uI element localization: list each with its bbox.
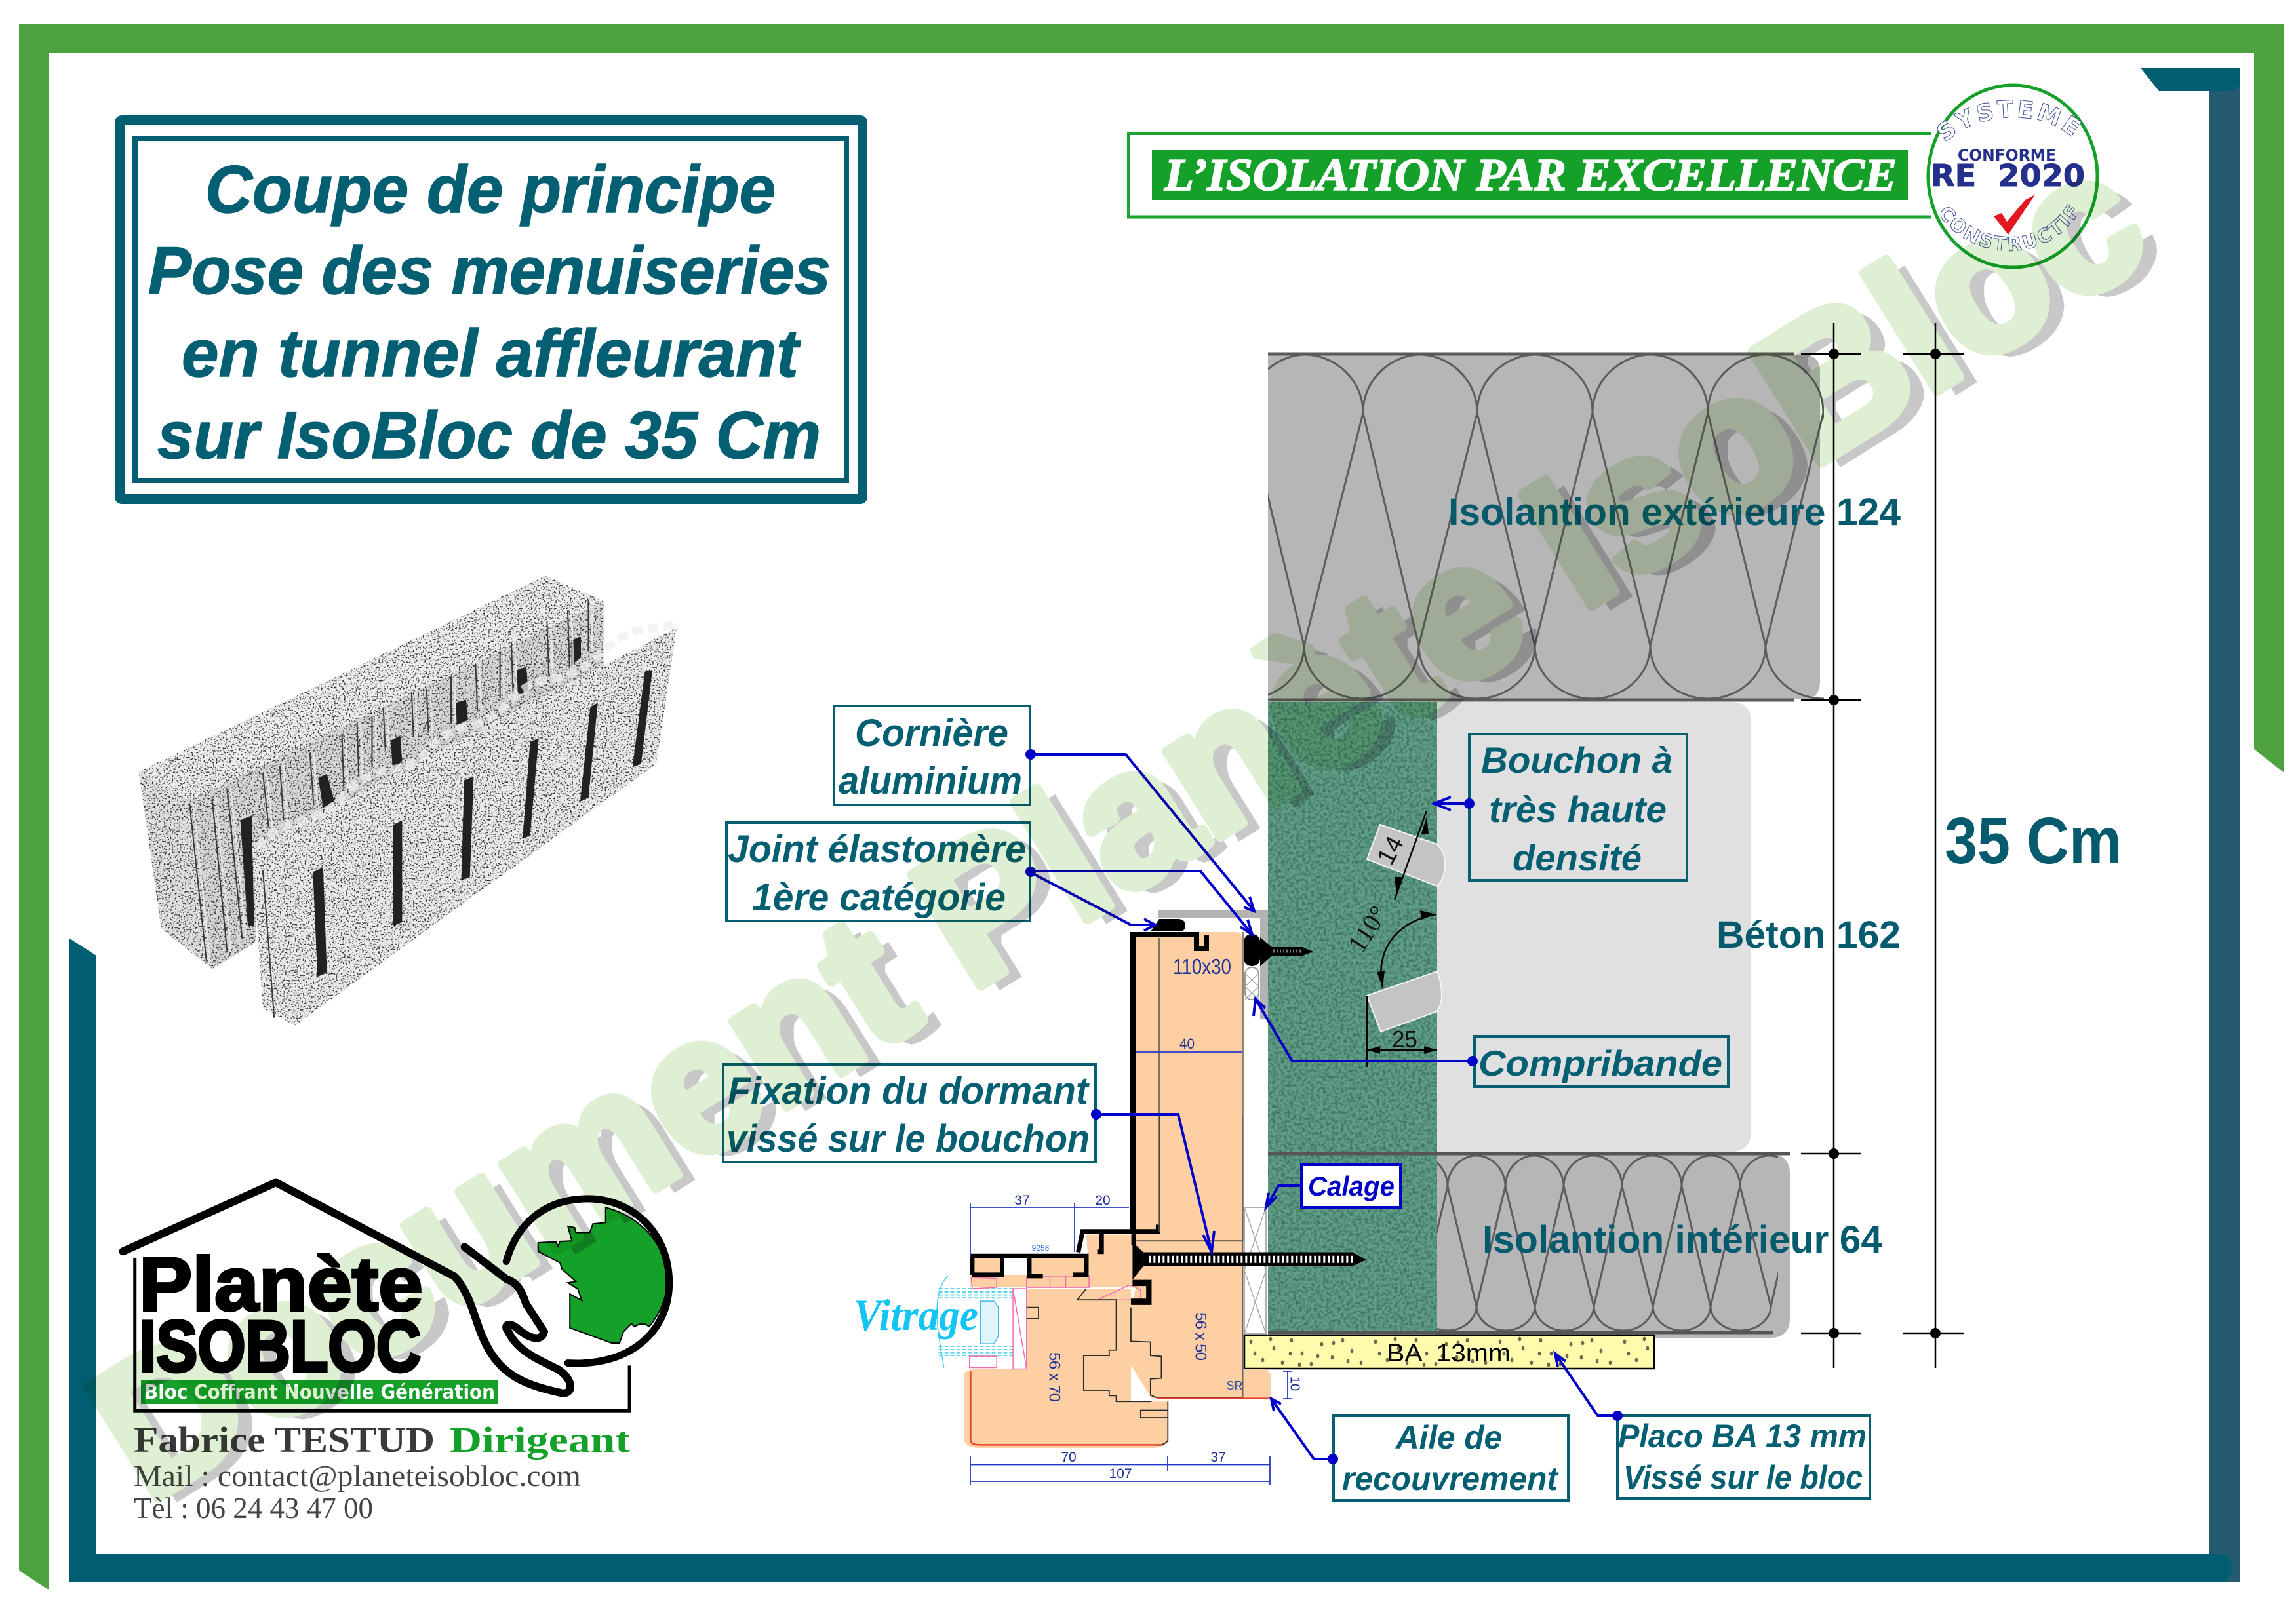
size 40: 40 [1179, 1036, 1195, 1052]
callout: fixation du dormant: vissé sur le bouchon [726, 1118, 1090, 1160]
label: exterior insulation: Isolantion extérieure 124 [1448, 491, 1901, 534]
title text: Coupe de principe [205, 152, 776, 227]
callout: bouchon [1434, 734, 1687, 880]
window frame cross section [854, 932, 1366, 1485]
callout: fixation du dormant: Fixation du dormant [728, 1070, 1090, 1112]
badge: red check [1994, 195, 2035, 235]
dimension 25: 25 [1392, 1026, 1417, 1053]
label: 35 Cm: 35 Cm [1945, 804, 2122, 878]
exterior insulation [1268, 353, 1901, 701]
angle bracket and joints [1151, 910, 1313, 1019]
title box: sur IsoBloc de 35 Cm [157, 398, 821, 473]
logo: house walls [135, 1258, 629, 1411]
callout: calage: Calage [1308, 1171, 1395, 1201]
contact phone: Tèl : 06 24 43 47 00 [134, 1491, 373, 1525]
compriband [1245, 967, 1259, 1000]
block slots and ribs [189, 600, 675, 1018]
contact name: Fabrice TESTUD [134, 1420, 435, 1460]
banner: isolation par excellence [1129, 134, 1931, 217]
callout: calage [1266, 1165, 1400, 1207]
dimension 110 degrees: 110° [1342, 901, 1393, 958]
logo: Planete IsoBloc [123, 1182, 669, 1411]
dimension 14: 14 [1372, 832, 1410, 869]
leader: corniere [1031, 754, 1254, 911]
small joint [1244, 934, 1260, 966]
pink seals [970, 1276, 1141, 1369]
size 20: 20 [1095, 1193, 1111, 1208]
size 110x30: 110x30 [1173, 954, 1231, 979]
size 37 top: 37 [1014, 1193, 1030, 1208]
shim calage [1244, 1207, 1266, 1334]
title box [119, 121, 863, 499]
concrete core [1437, 702, 1751, 1152]
contact details [134, 1420, 631, 1525]
wood outlines [1027, 1114, 1243, 1445]
logo: planete: Planète [139, 1241, 423, 1327]
size 37 bottom: 37 [1210, 1450, 1226, 1465]
contact mail: Mail : contact@planeteisobloc.com [134, 1459, 581, 1492]
logo: france map [538, 1207, 667, 1343]
post black outline [1133, 935, 1206, 1232]
logo: tagline band [141, 1380, 498, 1404]
badge: conforme RE 2020 [1926, 84, 2099, 269]
frame wood shapes [964, 1114, 1271, 1448]
blue dimensions of frame [970, 954, 1302, 1485]
title box: Pose des menuiseries [148, 233, 831, 308]
callout: bouchon: densité [1513, 837, 1642, 878]
size 10: 10 [1288, 1376, 1302, 1391]
SR mark: SR [1226, 1379, 1243, 1392]
glazing unit [937, 1276, 1013, 1368]
leader: placo [1555, 1354, 1617, 1416]
long fixing screw [1143, 1252, 1366, 1266]
product photo: isobloc block [139, 576, 677, 1026]
black aluminium profiles [972, 1114, 1158, 1276]
size 56x70: 56 x 70 [1046, 1352, 1063, 1402]
leader: compribande [1254, 999, 1473, 1061]
plasterboard BA13 [1244, 1335, 1654, 1369]
dovetail notches [1367, 825, 1445, 1032]
high density plug [1268, 702, 1437, 1332]
interior insulation [1268, 1154, 1882, 1338]
label: BA 13mm: BA 13mm [1387, 1340, 1511, 1367]
size 9258: 9258 [1032, 1243, 1050, 1253]
size 70: 70 [1061, 1450, 1077, 1465]
callout: compribande [1254, 999, 1728, 1087]
callout: placo BA 13: Vissé sur le bloc [1623, 1459, 1863, 1496]
callout: joint elastomere [726, 823, 1252, 935]
leader: aile [1271, 1399, 1333, 1459]
callout: bouchon: Bouchon à [1481, 739, 1673, 781]
label: beton: Béton 162 [1716, 914, 1901, 956]
frame post wood [1136, 932, 1243, 1127]
callout: bouchon: très haute [1489, 789, 1667, 830]
label: interior insulation: Isolantion intérieur 64 [1482, 1218, 1882, 1261]
callout: aile de recouvrement: Aile de [1395, 1419, 1502, 1456]
small screw [1260, 937, 1313, 966]
badge: constructif: CONSTRUCTIF [1941, 203, 2077, 252]
callout: corniere aluminium [834, 706, 1254, 911]
callout: placo BA 13: Placo BA 13 mm [1618, 1418, 1867, 1454]
badge: RE 2020: RE 2020 [1931, 158, 2085, 193]
watermark: Document Planète IsoBloc [57, 108, 2178, 1539]
elastomer joint [1151, 919, 1185, 931]
callout: joint elastomere: 1ère catégorie [752, 876, 1006, 919]
badge: conforme: CONFORME [1958, 146, 2056, 165]
contact role: Dirigeant [450, 1420, 631, 1460]
title box: en tunnel affleurant [182, 316, 801, 391]
badge: systeme: SYSTEME [1937, 100, 2082, 142]
plug dimensions [1342, 811, 1437, 1067]
logo: roof and hand [123, 1182, 570, 1393]
callout: compribande: Compribande [1478, 1043, 1722, 1083]
overall dimension lines [1801, 323, 1964, 1368]
logo: globe outline [506, 1199, 669, 1363]
logo: tagline: Bloc Coffrant Nouvelle Génération [144, 1381, 495, 1404]
leader: bouchon [1434, 797, 1469, 810]
leader: joint [1031, 871, 1252, 935]
callout: corniere aluminium: aluminium [839, 760, 1022, 802]
size 56x50: 56 x 50 [1192, 1312, 1210, 1361]
banner text: L’ISOLATION PAR EXCELLENCE [1164, 150, 1897, 201]
size 107: 107 [1109, 1466, 1132, 1481]
callout: corniere aluminium: Cornière [855, 712, 1008, 754]
red edge lines [970, 1371, 1271, 1445]
logo: isobloc: ISOBLOC [139, 1306, 421, 1387]
callout: placo BA 13 [1555, 1354, 1870, 1498]
leader: fixation [1096, 1114, 1214, 1252]
callout: aile de recouvrement: recouvrement [1342, 1460, 1559, 1497]
label: vitrage: Vitrage [854, 1290, 978, 1340]
leader: calage [1266, 1186, 1301, 1207]
callout: fixation du dormant [723, 1064, 1214, 1252]
callout: joint elastomere: Joint élastomère [728, 828, 1026, 870]
callout: aile de recouvrement [1271, 1399, 1568, 1500]
